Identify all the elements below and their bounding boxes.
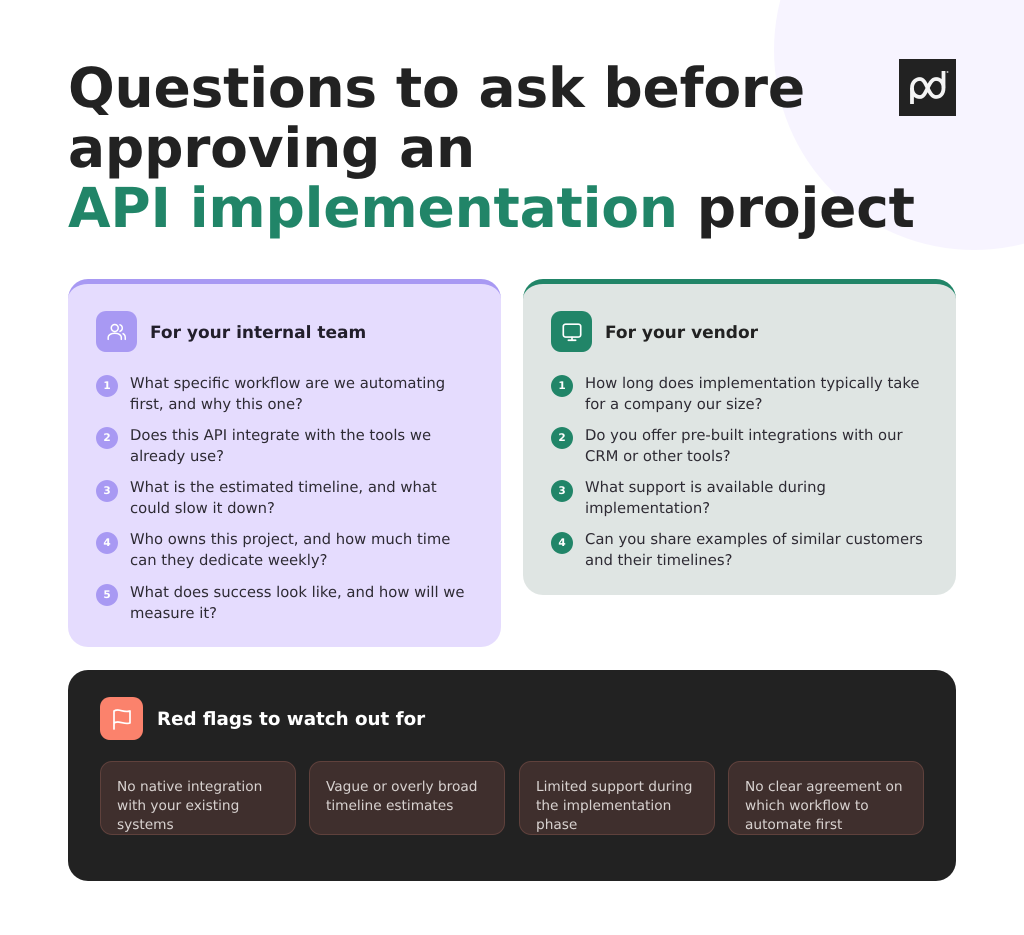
red flag 4: which workflow to: [745, 798, 869, 814]
red flag 3: Limited support during: [536, 779, 692, 795]
red flag 2: Vague or overly broad: [326, 779, 477, 795]
red flag 1: [100, 761, 296, 835]
question 4: [96, 531, 450, 569]
question 2: 2: [558, 432, 566, 444]
question 1: first, and why this one?: [130, 396, 303, 412]
question 2: 2: [103, 432, 111, 444]
question 2: CRM or other tools?: [585, 448, 731, 464]
question 4: Who owns this project, and how much time: [130, 531, 450, 548]
question 1: What specific workflow are we automating: [130, 374, 445, 392]
question 3: What is the estimated timeline, and what: [130, 479, 437, 496]
red flag 1: systems: [117, 817, 174, 833]
question 3: [96, 479, 437, 517]
red flag 1: No native integration: [117, 779, 262, 795]
question 5: What does success look like, and how will we: [130, 584, 465, 600]
red flag 3: phase: [536, 817, 577, 833]
red flag 2: [309, 761, 505, 835]
heading: vendor: For your vendor: [605, 322, 758, 342]
question 1: [96, 374, 445, 412]
red flag 2: timeline estimates: [326, 798, 453, 814]
question 4: 4: [558, 536, 566, 548]
question 5: [96, 584, 465, 622]
red flag 3: the implementation: [536, 798, 671, 814]
red flag 4: automate first: [745, 817, 842, 833]
question 3: [551, 479, 826, 517]
question 4: Can you share examples of similar customers: [585, 531, 923, 548]
title: approving an: [68, 116, 475, 180]
panel: vendor: [523, 279, 956, 595]
panel: internal team: [68, 279, 501, 647]
question 3: 3: [558, 484, 566, 496]
red flag 4: No clear agreement on: [745, 779, 903, 795]
title: API implementation project: [68, 176, 915, 240]
question 4: [551, 531, 923, 569]
background circle: [774, 0, 1024, 250]
icon: flag: [100, 697, 143, 740]
heading: red flags: Red flags to watch out for: [157, 709, 425, 730]
question 4: can they dedicate weekly?: [130, 552, 327, 569]
question 2: already use?: [130, 448, 224, 464]
question 2: Does this API integrate with the tools we: [130, 426, 431, 444]
question 3: could slow it down?: [130, 500, 275, 517]
red flag 4: [728, 761, 924, 835]
question 5: measure it?: [130, 604, 217, 622]
question 3: 3: [103, 484, 111, 496]
question 4: and their timelines?: [585, 552, 732, 569]
icon: users: [96, 311, 137, 352]
question 3: What support is available during: [585, 479, 826, 496]
red flag 1: with your existing: [117, 798, 239, 814]
question 3: implementation?: [585, 500, 710, 517]
question 2: Do you offer pre-built integrations with our: [585, 426, 903, 444]
question 1: 1: [558, 380, 566, 392]
question 1: 1: [103, 380, 111, 392]
heading: internal team: For your internal team: [150, 322, 366, 342]
panel: red flags: [68, 670, 956, 881]
question 1: [551, 374, 920, 412]
question 2: [551, 426, 903, 464]
icon: monitor: [551, 311, 592, 352]
title: Questions to ask before: [68, 56, 805, 120]
question 1: for a company our size?: [585, 396, 762, 412]
red flag 3: [519, 761, 715, 835]
title: [68, 56, 915, 240]
question 1: How long does implementation typically take: [585, 374, 920, 392]
question 2: [96, 426, 431, 464]
icon: pd logo: [899, 59, 956, 116]
question 5: 5: [103, 589, 111, 601]
question 4: 4: [103, 536, 111, 548]
